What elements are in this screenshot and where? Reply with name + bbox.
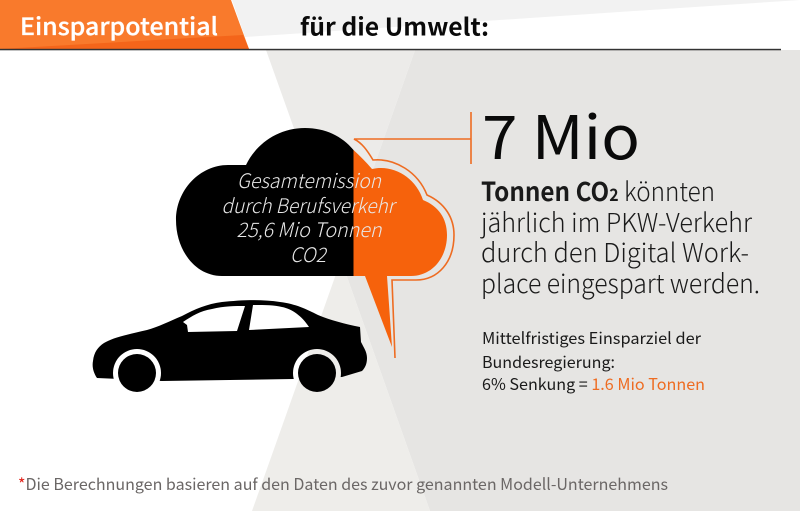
cloud text: Gesamtemission [237, 165, 382, 194]
cloud text: durch Berufsverkehr [222, 190, 397, 219]
main text block: jährlich im PKW-Verkehr [480, 203, 753, 240]
cloud orange segment [354, 150, 447, 347]
header [0, 0, 781, 50]
main text block: Tonnen CO2 könnten [481, 172, 715, 209]
footnote: *Die Berechnungen basieren auf den Daten des zuvor genannten Modell-Unternehmens [18, 471, 668, 495]
cloud text: 25,6 Mio Tonnen [236, 214, 383, 243]
cloud: total emissions [176, 128, 447, 347]
cloud text: CO2 [290, 239, 328, 268]
main text block: place eingespart werden. [481, 264, 760, 301]
savings target text [482, 325, 705, 395]
main text block [480, 172, 760, 301]
savings target text: Bundesregierung: [482, 349, 615, 373]
statistic: 7 Mio: 7 Mio [482, 90, 640, 177]
cloud black segment [176, 128, 354, 276]
callout outline and connector [354, 139, 471, 358]
header orange tab [0, 0, 249, 49]
cloud text [222, 165, 397, 268]
connector bar [470, 112, 472, 164]
savings target text: 6% Senkung = 1.6 Mio Tonnen [482, 371, 705, 395]
savings target text: Mittelfristiges Einsparziel der [482, 325, 702, 349]
icon: car [93, 300, 367, 392]
heading: für die Umwelt: für die Umwelt: [300, 8, 489, 42]
main text block: durch den Digital Work- [481, 233, 749, 270]
heading: Einsparpotential: Einsparpotential [20, 7, 218, 42]
